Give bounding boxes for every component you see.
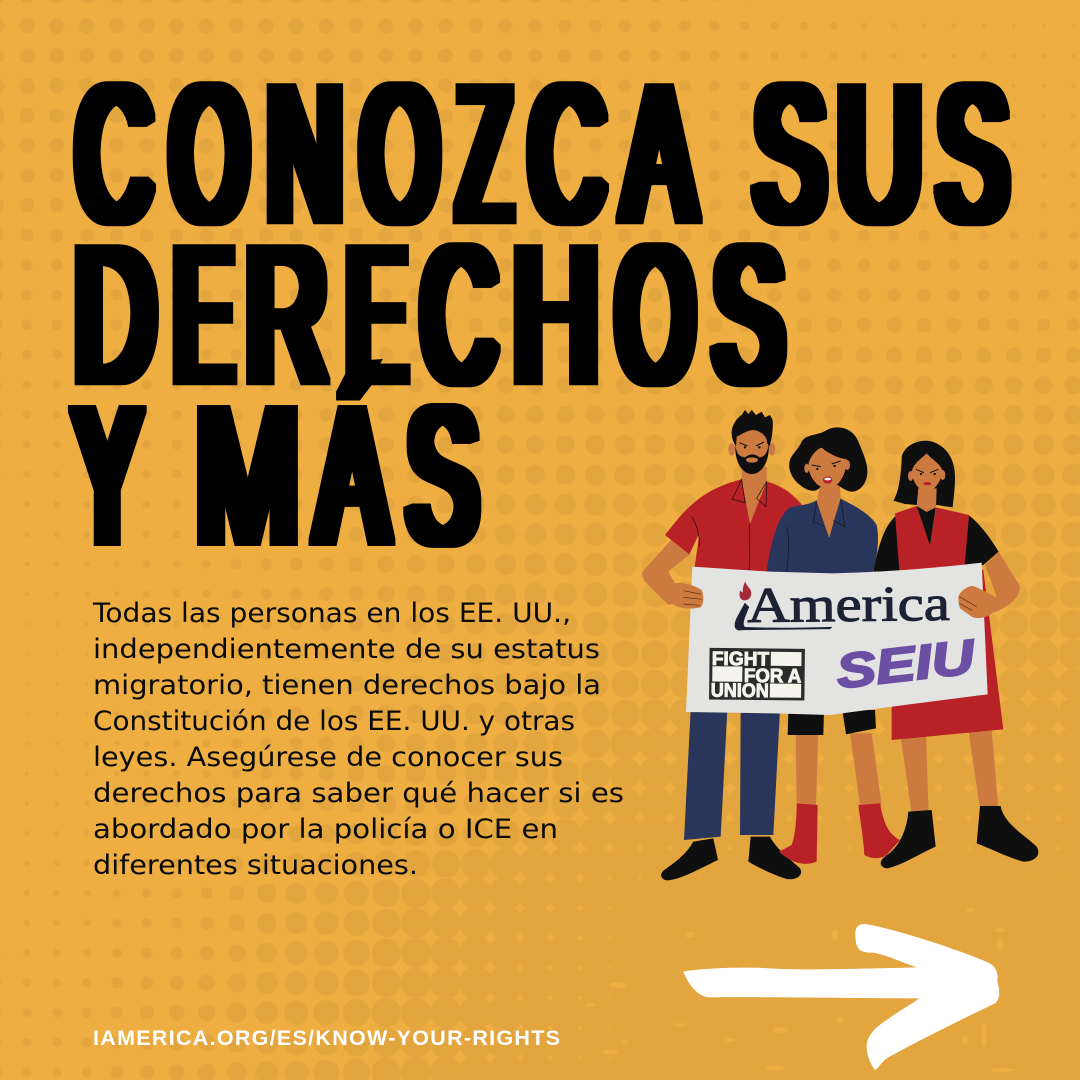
body text paragraph: Constitución de los EE. UU. y otras <box>93 706 575 737</box>
title line 1: A <box>624 45 694 263</box>
title line 2: S <box>714 207 783 424</box>
title line 1: S <box>938 45 1007 263</box>
title line 2: C <box>422 205 496 423</box>
title line 3 <box>75 366 477 585</box>
hands over the sign <box>665 583 1000 618</box>
body text paragraph: migratorio, tienen derechos bajo la <box>93 670 601 701</box>
title line 2 <box>74 205 783 424</box>
logo: Fight for a Union: FIGHT <box>712 649 769 670</box>
logo: SEIU: SEIU <box>833 630 978 699</box>
title line 3: Y <box>75 366 140 584</box>
logo: Fight for a Union: UNION <box>711 681 769 702</box>
title line 3: S <box>408 368 477 585</box>
title line 1: N <box>267 45 343 263</box>
body text paragraph <box>92 598 624 881</box>
body text paragraph: abordado por la policía o ICE en <box>93 814 558 845</box>
logo: Fight for a Union <box>709 648 805 702</box>
title line 2: O <box>617 205 694 423</box>
title line 1 <box>76 44 1007 263</box>
title line 3: M <box>196 366 299 584</box>
title line 1: O <box>171 44 248 262</box>
illustration: three people holding a sign <box>642 410 1038 880</box>
sign with logos <box>686 563 988 715</box>
logo: Fight for a Union: FOR A <box>744 666 801 687</box>
title line 2: E <box>174 206 232 423</box>
body text paragraph: leyes. Asegúrese de conocer sus <box>93 742 563 773</box>
title line 1: Z <box>459 44 510 262</box>
title line 1: C <box>76 46 151 263</box>
body text paragraph: derechos para saber qué hacer si es <box>93 778 624 809</box>
body text paragraph: diferentes situaciones. <box>93 850 418 881</box>
title line 3: Á <box>317 368 387 585</box>
title line 2: R <box>246 205 327 423</box>
body text paragraph: independientemente de su estatus <box>93 634 600 665</box>
title line 1: S <box>754 46 825 263</box>
person: man in red shirt <box>642 410 817 880</box>
title line 1: U <box>837 45 922 263</box>
website link: IAMERICA.ORG/ES/KNOW-YOUR-RIGHTS <box>93 1026 560 1050</box>
title line 1: O <box>362 44 438 262</box>
person: woman in red dress <box>873 441 1038 868</box>
title line 2: D <box>74 205 155 423</box>
title line 2: H <box>513 207 599 424</box>
logo: iAmerica: America <box>747 575 950 633</box>
title line 1: C <box>530 46 604 263</box>
arrow pointing right <box>683 924 999 1070</box>
title line 2: E <box>347 205 405 423</box>
title: Conozca sus derechos y más <box>74 44 1007 585</box>
person: woman in navy shirt <box>766 427 900 864</box>
body text paragraph: Todas las personas en los EE. UU., <box>92 598 571 629</box>
